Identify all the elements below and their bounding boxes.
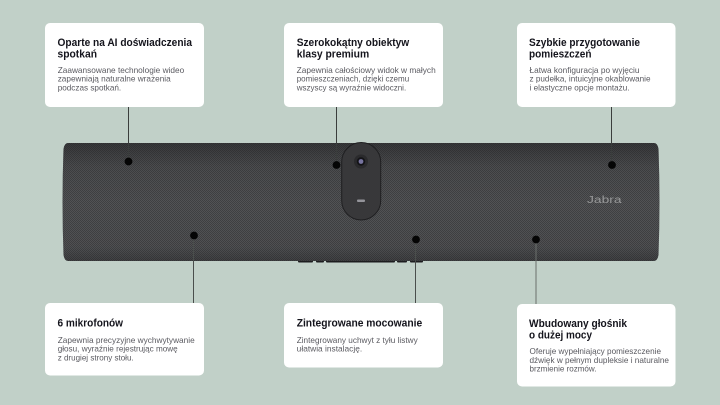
body text: Zaawansowane technologie wideo bbox=[58, 65, 185, 75]
body text: dźwięk w pełnym dupleksie i naturalne bbox=[530, 355, 669, 365]
connector: top right bbox=[608, 107, 616, 169]
heading bbox=[529, 37, 640, 60]
body text: Zapewnia całościowy widok w małych bbox=[297, 65, 436, 75]
body text bbox=[297, 335, 419, 354]
body text: Oferuje wypełniający pomieszczenie bbox=[530, 346, 661, 356]
body text bbox=[58, 335, 195, 362]
body text: Zapewnia precyzyjne wychwytywanie bbox=[58, 335, 195, 345]
heading: o dużej mocy bbox=[529, 330, 593, 342]
connector: bottom middle bbox=[412, 236, 420, 303]
heading: Szybkie przygotowanie bbox=[529, 37, 640, 49]
connector: top middle bbox=[333, 107, 340, 169]
heading bbox=[58, 37, 193, 60]
mounting rail under the bar bbox=[298, 259, 423, 262]
panel: wide-angle lens bbox=[284, 23, 443, 107]
panel: powerful speaker bbox=[517, 304, 676, 386]
heading bbox=[297, 37, 410, 60]
heading: klasy premium bbox=[297, 48, 369, 60]
heading: spotkań bbox=[58, 48, 97, 60]
bar body bbox=[62, 143, 660, 261]
heading: pomieszczeń bbox=[529, 48, 592, 60]
connector: top left bbox=[125, 107, 132, 165]
panel: quick room setup bbox=[517, 23, 676, 107]
body text bbox=[296, 65, 436, 92]
body text: zapewniają naturalne wrażenia bbox=[58, 74, 171, 84]
body text bbox=[530, 65, 651, 92]
heading bbox=[529, 318, 628, 342]
panel: integrated mount bbox=[284, 303, 443, 368]
body text: głosu, wyraźnie rejestrując mowę bbox=[58, 344, 178, 354]
body text: podczas spotkań. bbox=[58, 82, 121, 92]
body text: z pudełka, intuicyjne okablowanie bbox=[530, 74, 651, 84]
heading: 6 mikrofonów bbox=[58, 318, 123, 330]
body text: z drugiej strony stołu. bbox=[58, 352, 134, 362]
body text: i elastyczne opcje montażu. bbox=[530, 82, 630, 92]
body text: brzmienie rozmów. bbox=[530, 364, 596, 374]
connector: bottom left bbox=[190, 232, 198, 303]
heading: Oparte na AI doświadczenia bbox=[58, 37, 193, 49]
camera module bbox=[342, 142, 381, 220]
camera lens bbox=[354, 154, 368, 168]
heading: Szerokokątny obiektyw bbox=[297, 37, 410, 49]
body text bbox=[58, 65, 185, 92]
brand logo: Jabra bbox=[587, 195, 622, 206]
status light bbox=[357, 200, 365, 202]
heading: Wbudowany głośnik bbox=[529, 318, 628, 330]
device: Jabra video bar bbox=[62, 142, 660, 262]
body text: ułatwia instalację. bbox=[297, 344, 362, 354]
panel: six microphones bbox=[45, 303, 204, 376]
heading: Zintegrowane mocowanie bbox=[297, 318, 422, 330]
body text: Zintegrowany uchwyt z tyłu listwy bbox=[297, 335, 419, 345]
body text bbox=[530, 346, 669, 374]
connector: bottom right bbox=[532, 236, 540, 304]
body text: Łatwa konfiguracja po wyjęciu bbox=[530, 65, 640, 75]
body text: wszyscy są wyraźnie widoczni. bbox=[296, 82, 406, 92]
panel: AI meetings bbox=[45, 23, 204, 107]
body text: pomieszczeniach, dzięki czemu bbox=[297, 74, 410, 84]
